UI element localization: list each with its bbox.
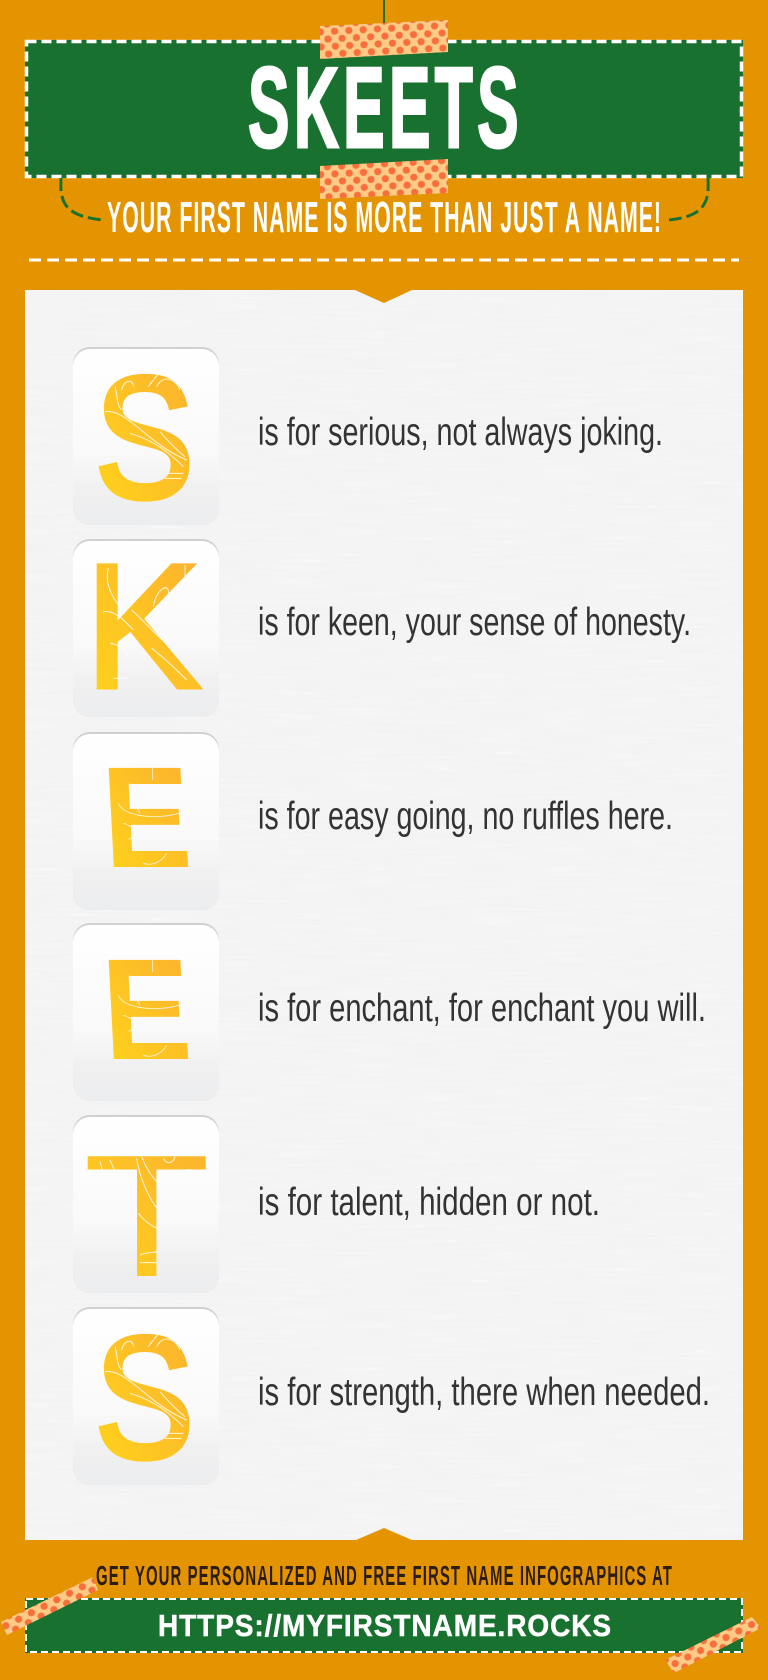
tile — [73, 539, 219, 717]
row: S — [73, 342, 663, 533]
footer tape left — [1, 1577, 98, 1635]
row: K — [73, 527, 691, 724]
row: E — [73, 923, 706, 1101]
letter E: E — [98, 930, 195, 1090]
row: S — [73, 1302, 710, 1493]
footer tape right — [665, 1617, 761, 1673]
letter T: T — [83, 1118, 211, 1313]
thread above title tape — [383, 0, 385, 25]
tile — [73, 1115, 219, 1293]
row: E — [73, 732, 673, 910]
top tape — [320, 20, 448, 59]
letter E: E — [98, 738, 195, 898]
footer banner — [25, 1598, 743, 1653]
bottom title tape — [320, 159, 448, 199]
bottom notch — [356, 1528, 412, 1540]
letter S: S — [95, 342, 194, 533]
description T: is for talent, hidden or not. — [258, 1181, 600, 1224]
tile — [73, 923, 219, 1101]
letter K: K — [85, 527, 200, 724]
top notch — [355, 290, 412, 303]
right dashed bracket — [669, 178, 708, 220]
tile — [73, 347, 219, 525]
tile — [73, 732, 219, 910]
tile — [73, 1307, 219, 1485]
url text: HTTPS://MYFIRSTNAME.ROCKS — [158, 1609, 612, 1643]
row: T — [73, 1115, 600, 1313]
panel: letters — [25, 290, 743, 1540]
letter S: S — [95, 1302, 194, 1493]
dashed divider — [29, 258, 739, 262]
left dashed bracket — [61, 178, 103, 220]
title text: SKEETS — [248, 45, 523, 172]
title banner — [25, 40, 743, 178]
